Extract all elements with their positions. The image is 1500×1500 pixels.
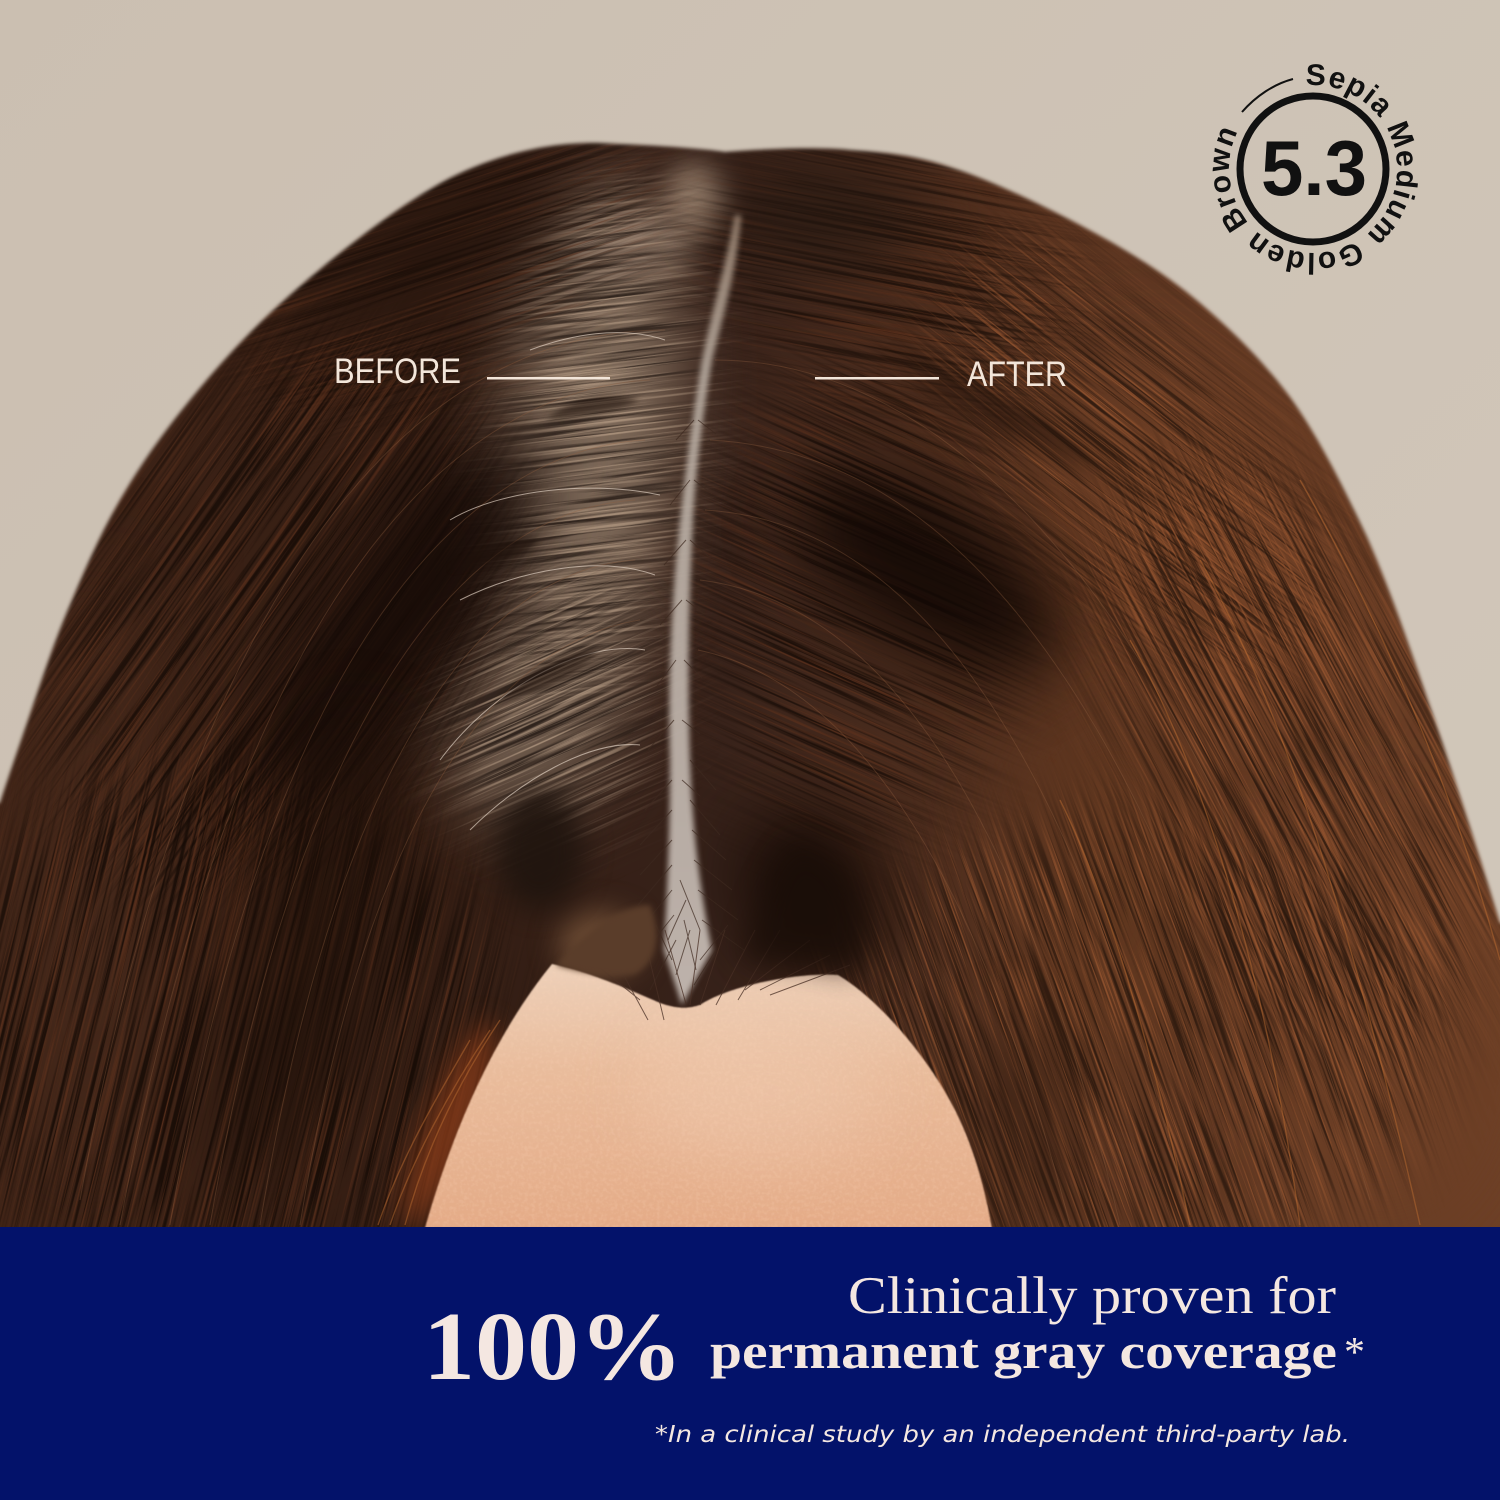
streak texture: gray roots lower [416,560,694,847]
headline: Clinically proven for [848,1267,1336,1325]
streak texture: far right [774,194,1500,1326]
bottom banner [0,1227,1500,1500]
mid-brown thin strands [80,330,1370,1225]
label: AFTER: AFTER [967,355,1067,394]
headline: permanent gray coverage [710,1323,1337,1379]
headline [710,1267,1365,1379]
coppery highlight strands [378,480,1500,1225]
stat: 100%: 100% [423,1293,683,1400]
hair [0,140,1500,1227]
shade badge: Sepia Medium Golden Brown [1212,64,1418,275]
scalp parting line [664,215,741,1005]
hairline wisps [590,930,850,1020]
streak texture: lower left [0,742,502,1227]
footnote: *In a clinical study by an independent third-party lab. [655,1420,1350,1448]
label: BEFORE: BEFORE [334,352,461,391]
hairline tufts [556,840,866,975]
shadow overlays [194,135,1103,1240]
streak texture: mid right [401,161,1319,1039]
headline: * [1344,1330,1365,1376]
dark gaps on before side [450,396,640,700]
after side tonal shading [1070,394,1314,702]
bright gray strands on before side [440,333,665,830]
streak texture: side left [30,336,490,904]
forehead skin [425,964,995,1228]
fine root hairs along parting [638,420,744,990]
streak texture: upper right [668,10,1500,910]
streak texture: gray roots upper [480,166,733,710]
streak texture: top left [242,144,689,404]
shade badge: 5.3 [1261,124,1367,212]
streak texture: top right [676,150,1088,418]
streak texture: lower right [634,574,1500,1500]
before side tonal shading [20,164,725,1200]
